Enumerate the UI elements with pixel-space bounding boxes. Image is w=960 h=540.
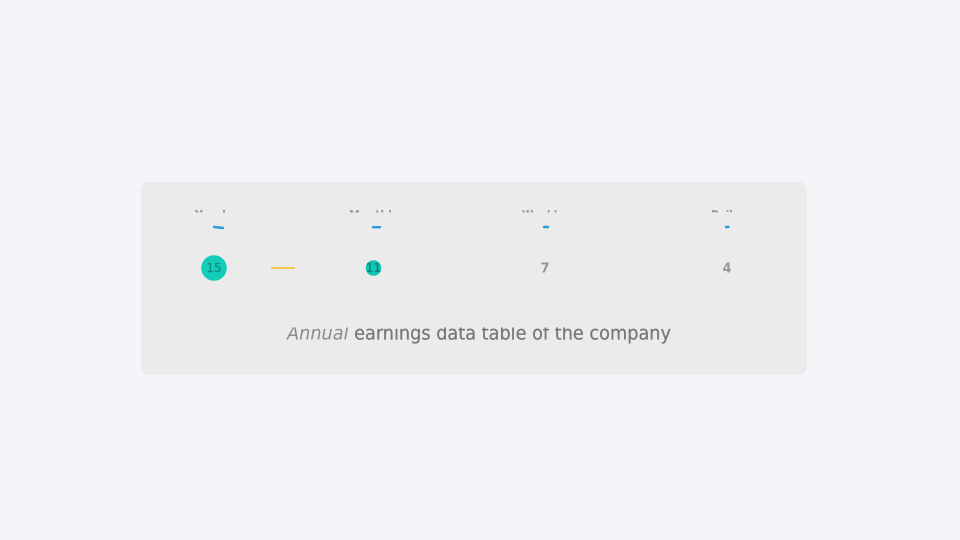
- value: 4: 4: [722, 262, 732, 276]
- panel: earnings table: [141, 182, 807, 375]
- column headings, clipped by reveal: [195, 210, 732, 212]
- column headings, clipped by reveal: Daily: [711, 209, 739, 224]
- value: 15: [201, 255, 227, 281]
- value: 11: 11: [366, 261, 381, 275]
- column headings, clipped by reveal: Yearly: [194, 209, 233, 224]
- caption: Annual earnings data table of the company: [286, 324, 671, 344]
- header tick marks: [214, 227, 728, 228]
- connector line: [271, 267, 295, 269]
- column headings, clipped by reveal: Monthly: [349, 209, 399, 224]
- value: 15: 15: [206, 261, 222, 275]
- value: 7: 7: [540, 262, 550, 276]
- column headings, clipped by reveal: Weekly: [522, 209, 564, 224]
